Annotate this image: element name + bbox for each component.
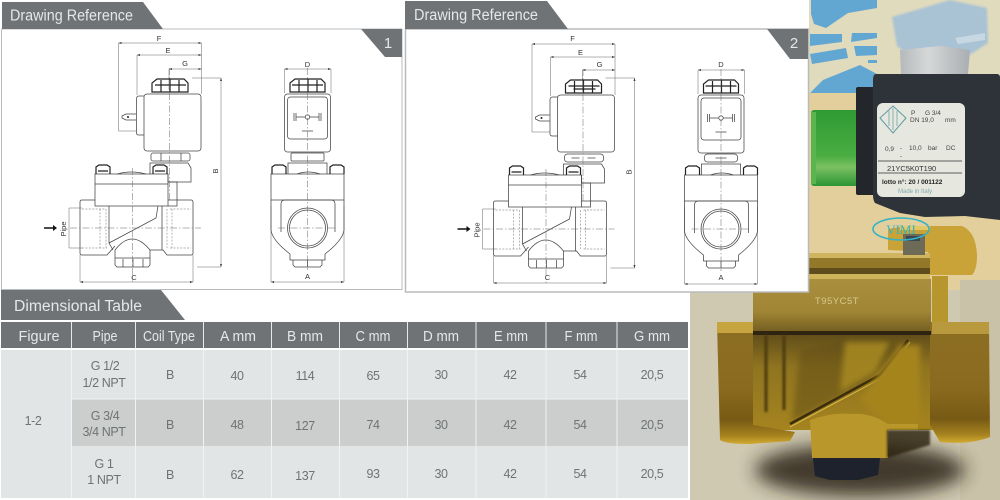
- VIMI watermark: [873, 218, 929, 240]
- dimension lines: B: [624, 169, 634, 175]
- row: G 3/4: 48: [230, 418, 244, 432]
- row: G 1: 1 NPT: [87, 473, 121, 487]
- table header row: Figure: [18, 328, 60, 345]
- table header row: B mm: [287, 328, 323, 345]
- black plug: [813, 458, 880, 480]
- table header row: F mm: [564, 328, 598, 345]
- row: G 1: 62: [230, 468, 244, 482]
- dimension lines: F: [157, 34, 162, 43]
- row: G 1: B: [166, 468, 174, 482]
- coil label: P: [911, 110, 915, 117]
- row: G 1/2: [82, 359, 664, 390]
- valve bonnet: [508, 164, 604, 207]
- table header row: E mm: [494, 328, 528, 345]
- bonnet front: [271, 163, 344, 200]
- coil label: lotto n°: 20 / 001122: [882, 178, 943, 186]
- coil label: [877, 103, 965, 197]
- coil connector block: [856, 87, 878, 195]
- coil label: mm: [945, 117, 956, 124]
- coil label: 21YC5K0T190: [887, 164, 936, 173]
- row: G 1/2: 54: [573, 368, 587, 382]
- photo: solenoid valve: [690, 0, 1000, 500]
- dimension lines: D: [305, 60, 311, 69]
- panel: drawing reference 2: [405, 1, 808, 292]
- valve body: [80, 200, 193, 267]
- brass upper parts: [800, 226, 977, 322]
- panel 1 frame: [2, 29, 402, 290]
- coil: [536, 80, 614, 162]
- dimension lines: G: [182, 59, 188, 68]
- heading tab: drawing reference 2: Drawing Reference: [414, 7, 538, 24]
- flow arrow: [44, 225, 57, 231]
- coil front: [284, 79, 330, 161]
- row: G 1/2: 20,5: [641, 368, 664, 382]
- table header row: C mm: [356, 328, 390, 345]
- dimension lines: B: [211, 168, 220, 174]
- row: G 3/4: [82, 409, 664, 439]
- coil label: DN 19,0: [910, 117, 934, 124]
- dimension lines: D: [718, 60, 724, 69]
- photo background: [690, 0, 1000, 500]
- metal knob: [900, 46, 970, 74]
- row: G 1: 30: [434, 467, 448, 481]
- row: G 1: [87, 457, 664, 487]
- table body backgrounds: [1, 350, 688, 498]
- row: G 3/4: 30: [434, 418, 448, 432]
- brass bonnet: [753, 279, 931, 334]
- front view drawing 2: [684, 60, 758, 285]
- row: G 1: G 1: [95, 457, 114, 471]
- VIMI watermark: VIMI: [886, 222, 916, 237]
- dimension lines: [472, 34, 636, 284]
- row: G 1/2: 1/2 NPT: [82, 376, 126, 390]
- heading tab: drawing reference 1: [2, 2, 163, 29]
- coil front: [698, 80, 744, 162]
- row: G 1/2: B: [166, 368, 174, 382]
- coil label: 0,9: [885, 146, 894, 153]
- dimension lines: A: [718, 273, 724, 282]
- row: G 3/4: 127: [295, 419, 315, 433]
- figure number 2: [767, 29, 808, 59]
- dimension lines: [684, 60, 758, 285]
- figure number 2: 2: [790, 35, 798, 52]
- dimension lines: A: [305, 272, 310, 281]
- centre lines: [692, 69, 750, 271]
- row: G 1/2: G 1/2: [91, 359, 120, 373]
- dimension lines: G: [597, 60, 603, 69]
- row: G 1/2: 114: [296, 369, 315, 383]
- row: G 1: 137: [295, 469, 315, 483]
- row: G 3/4: G 3/4: [91, 409, 120, 423]
- row: G 3/4: 20,5: [641, 418, 664, 432]
- body front with port: [684, 201, 758, 268]
- coil: [122, 79, 201, 161]
- row: G 1: 93: [366, 467, 380, 481]
- dimension lines: C: [131, 273, 137, 282]
- figure cell: 1-2: [25, 414, 42, 428]
- valve bonnet: [95, 163, 191, 206]
- row: G 3/4: B: [166, 418, 174, 432]
- dimension lines: Pipe: [472, 222, 482, 238]
- heading tab: dimensional table: [1, 290, 185, 320]
- coil label: -: [900, 153, 902, 160]
- table header row: Coil Type: [143, 328, 195, 345]
- side view drawing 2: [458, 34, 636, 284]
- row: G 3/4: 42: [503, 418, 517, 432]
- dimension lines: [59, 34, 222, 283]
- row: G 1: 20,5: [641, 467, 664, 481]
- blue printed paper: [810, 0, 877, 93]
- coil label: 10,0: [909, 145, 922, 152]
- centre lines: [70, 68, 201, 282]
- side view drawing 1: [44, 34, 222, 283]
- coil label: bar: [928, 145, 938, 152]
- coil label: Made in Italy: [898, 189, 932, 195]
- heading tab: dimensional table: Dimensional Table: [14, 298, 142, 315]
- centre lines: [278, 68, 337, 270]
- black coil: [873, 74, 1000, 220]
- coil label: -: [900, 145, 902, 152]
- figure number 1: [361, 29, 402, 57]
- coil label: G 3/4: [925, 110, 941, 117]
- transparent connector: [892, 0, 988, 72]
- row: G 3/4: 54: [573, 418, 587, 432]
- table header row: Pipe: [92, 328, 118, 345]
- dimension lines: [271, 60, 344, 283]
- panel: dimensional table: [1, 290, 688, 498]
- brass body: [717, 322, 990, 458]
- table header row: A mm: [220, 328, 256, 345]
- row: G 1/2: 65: [366, 369, 380, 383]
- table header row: D mm: [423, 328, 459, 345]
- coil label: DC: [946, 145, 956, 152]
- panel 2 frame: [406, 29, 808, 292]
- bonnet front: [684, 164, 758, 201]
- dimension lines: E: [165, 46, 171, 55]
- centre lines: [484, 69, 614, 283]
- table header row: G mm: [634, 328, 670, 345]
- figure number 1: 1: [384, 35, 392, 52]
- panel: drawing reference 1: [2, 2, 402, 290]
- row: G 3/4: 74: [366, 418, 380, 432]
- valve body: [494, 201, 606, 268]
- heading tab: drawing reference 2: [405, 1, 568, 29]
- table header row: [1, 322, 688, 348]
- front view drawing 1: [271, 60, 344, 283]
- row: G 1/2: 42: [503, 368, 517, 382]
- dimension lines: E: [578, 48, 583, 57]
- row: G 1/2: 40: [230, 369, 244, 383]
- row: G 1: 42: [503, 467, 517, 481]
- heading tab: drawing reference 1: Drawing Reference: [10, 8, 133, 24]
- flow arrow: [458, 226, 470, 232]
- green fitting: [811, 110, 859, 186]
- row: G 1/2: 30: [434, 368, 448, 382]
- dimension lines: C: [545, 273, 551, 282]
- dimension lines: F: [570, 34, 575, 43]
- brass bonnet: T95YC5T: [815, 296, 859, 307]
- dimension lines: Pipe: [59, 221, 68, 237]
- row: G 3/4: 3/4 NPT: [82, 425, 126, 439]
- row: G 1: 54: [573, 467, 587, 481]
- body front with port: [271, 200, 344, 267]
